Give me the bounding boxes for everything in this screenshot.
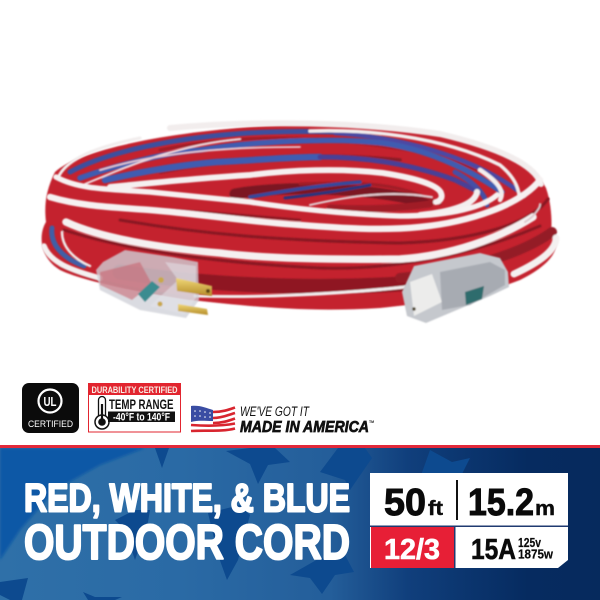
spec panel [370,473,568,568]
temp range label: TEMP RANGE [109,397,174,412]
decorative stars [0,448,470,600]
cord coil photo [42,123,556,310]
temperature values: -40°F to 140°F [113,412,170,424]
inner white loop [110,170,442,202]
cord 2 white stripe [50,180,540,229]
bottom thin white line [195,287,405,297]
title line 2: OUTDOOR CORD [24,516,350,570]
icon: UL certified badge [22,383,79,433]
right bottom white [514,238,556,274]
icon: american flag [191,406,235,432]
coil silhouette [42,124,556,310]
amperage: 15A [471,534,516,566]
cord 1 white stripe [56,177,497,216]
icon: gold prong top [176,278,212,296]
made in america text [240,404,374,436]
tagline: WE'VE GOT IT [240,404,310,419]
spec panel: m [535,498,555,520]
cord 3 white stripe [66,217,533,259]
UL mark: UL [44,394,57,409]
icon: gold prong bottom [178,304,208,315]
voltage: 125v [518,536,541,550]
badge heading: DURABILITY CERTIFIED [92,385,178,396]
wattage: 1875w [518,548,553,562]
icon: plug [96,250,212,318]
blue stripes top [70,131,335,172]
spec panel: ft [428,498,443,520]
white arcs right [420,192,477,215]
trademark: TM [369,420,374,424]
banner background [0,445,600,600]
length in metres: 15.2 [468,482,534,524]
title line 1: RED, WHITE, & BLUE [24,476,350,520]
outer top white edge [170,123,541,184]
badge: durability certified temp range [88,383,181,432]
dark interior gaps [235,189,425,202]
length in feet: 50 [384,482,426,524]
icon: thermometer [95,397,109,429]
spec panel: 12/3 [384,534,440,566]
slogan: MADE IN AMERICA [240,419,369,436]
gauge box [371,527,454,568]
icon: connector [402,253,509,323]
certified label: CERTIFIED [28,419,73,430]
bottom left stripes [44,246,100,278]
coil stripes and shading [44,123,556,298]
thin white lines top [85,139,240,184]
title [24,476,350,570]
inner small stripes [250,182,360,197]
